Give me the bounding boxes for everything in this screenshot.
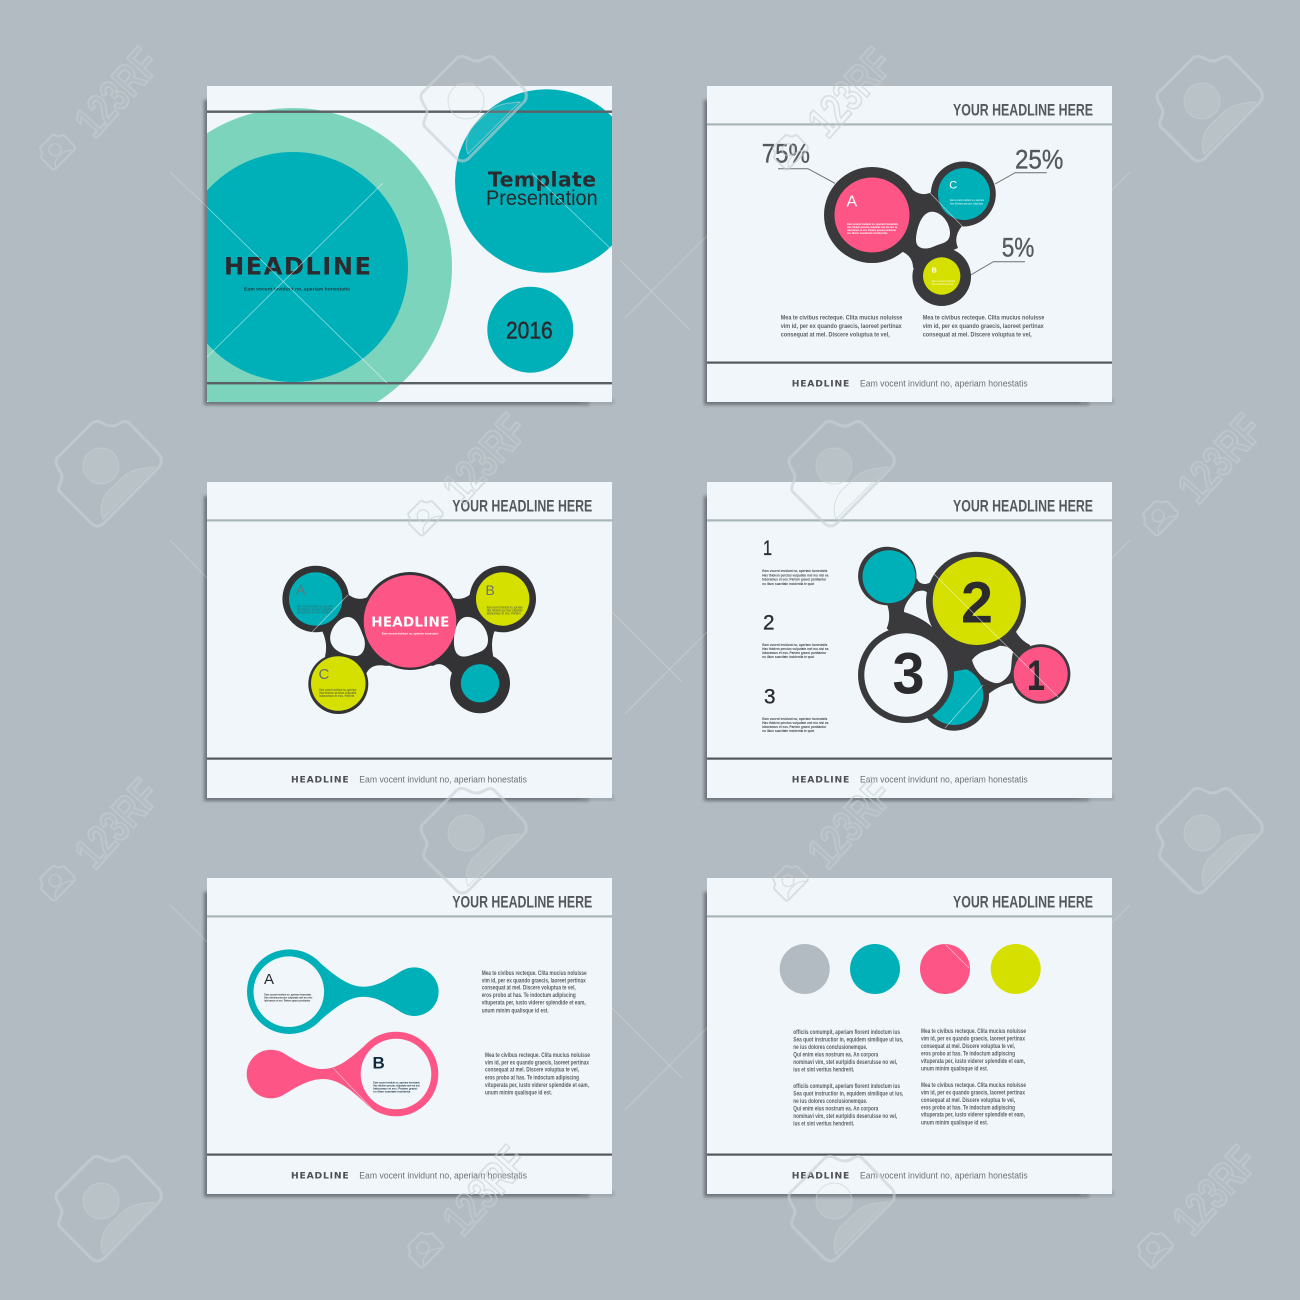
circle C: laboramus et eos. Partem: [319, 694, 354, 698]
circle A: [289, 572, 342, 626]
teal connector shape A: laboramus et eos. Partem graeci ponitantur: [264, 998, 311, 1002]
circle C: [938, 168, 990, 220]
left text block 2: officiis comumpit, aperiam florent indoctum ius: [793, 1083, 900, 1090]
circle A: laboramus et eos. Partem graeci ponitantur: [847, 228, 897, 232]
watermark stamps: 123RF: [65, 769, 169, 878]
panel: headline network slide: [204, 482, 614, 801]
watermark stamps: 123RF: [798, 769, 902, 878]
right text block 2: Mea te civibus recteque. Clita mucius noluisse: [921, 1082, 1026, 1089]
cover title: Template: [488, 168, 596, 192]
circle A: Eam vocent invidunt no, aperiam: [297, 604, 333, 608]
right text block 2: eros probo at has. Te indoctum adipiscing: [921, 1104, 1015, 1111]
right text block 1: unum minim qualisque id est.: [921, 1065, 988, 1072]
text block A: Mea te civibus recteque. Clita mucius noluisse: [482, 970, 587, 977]
right text block 2: unum minim qualisque id est.: [921, 1119, 988, 1126]
watermark stamps: 123RF: [1163, 1136, 1267, 1245]
percentage labels: 5%: [1002, 233, 1034, 263]
left text block 2: ne ius dolores conclusionemque.: [793, 1098, 867, 1105]
circle B: [476, 572, 529, 626]
circle C: [311, 656, 366, 711]
watermark stamps: 123RF: [433, 404, 537, 513]
list item 3: laboramus et eos. Partem graeci ponitantur: [762, 725, 827, 729]
right text block 2: consequat at mel. Discere voluptua te vel,: [921, 1097, 1015, 1104]
left text block 2: Qui enim eius nostrum ea. An corpora: [793, 1106, 879, 1113]
list item 1: no illum suavitate incidentia te quot: [762, 582, 815, 586]
pink connector shape B: Eam vocent invidunt no, aperiam honestatis: [373, 1080, 420, 1084]
right text block 1: vim id, per ex quando graecis, laoreet pertinax: [921, 1036, 1025, 1043]
cover headline: HEADLINE: [224, 252, 371, 280]
pink connector shape B: [247, 1032, 438, 1116]
text block B: eros probo at has. Te indoctum adipiscing: [485, 1074, 579, 1081]
circle B: Has thiolem perctus vulputate: [487, 608, 523, 612]
circle C: C: [318, 666, 330, 683]
panel: colour palette slide: [704, 878, 1114, 1197]
circle D: [461, 664, 499, 702]
text block A: consequat at mel. Discere voluptua te vel,: [482, 985, 576, 992]
circle A: A: [846, 194, 858, 211]
text block B: vituperata per, iusto viderer splendide et eam,: [485, 1082, 589, 1089]
text block B: [485, 1052, 590, 1096]
percentage labels: [762, 139, 1063, 263]
slide footer: HEADLINE: [792, 775, 849, 786]
slide header: YOUR HEADLINE HERE: [953, 497, 1093, 516]
list item 2: Has thiolem perctus vulputate mel mu nisi ea: [762, 647, 828, 651]
circle B: Eam vocent invidunt no, aperiam: [487, 606, 523, 610]
circle 1: [1014, 647, 1068, 701]
circle B: laboramus et eos. Partem: [487, 612, 521, 616]
circle A: Has thiolem perctus vulputate: [297, 608, 333, 612]
panel: percentages slide: [704, 86, 1114, 405]
right text block 1: vituperata per, iusto viderer splendide et eam,: [921, 1058, 1025, 1065]
list item 1: laboramus et eos. Partem graeci ponitantur: [762, 578, 827, 582]
right text block 2: [921, 1082, 1026, 1126]
body text right: vim id, per ex quando graecis, laoreet pertinax: [923, 323, 1044, 330]
slide header: YOUR HEADLINE HERE: [953, 101, 1093, 120]
slide footer: [707, 1154, 1112, 1182]
metaball network: [282, 566, 536, 714]
left text block 1: Qui enim eius nostrum ea. An corpora: [793, 1052, 879, 1059]
circle A: laboramus et eos. Partem: [297, 610, 331, 614]
slide footer: HEADLINE: [792, 379, 849, 390]
slide footer: [707, 758, 1112, 786]
circle A: Has thiolem perctus vulputate mel mu nisi ea: [847, 225, 898, 229]
list item 2: laboramus et eos. Partem graeci ponitantur: [762, 651, 827, 655]
circle 2: [926, 552, 1026, 652]
slide header: YOUR HEADLINE HERE: [953, 893, 1093, 912]
text block B: vim id, per ex quando graecis, laoreet pertinax: [485, 1059, 589, 1066]
circle A: no illum suavitate incidentia: [847, 231, 888, 235]
list item 3: [762, 685, 828, 733]
list item 1: Eam vocent invidunt no, aperiam honestatis: [762, 569, 827, 573]
slide footer: Eam vocent invidunt no, aperiam honestatis: [860, 379, 1028, 389]
circle B: B: [486, 582, 495, 598]
right text block 1: [921, 1028, 1026, 1072]
slide header: YOUR HEADLINE HERE: [452, 893, 592, 912]
circle 3: 3: [892, 641, 924, 706]
teal connector shape A: Has thiolem perctus vulputate mel mu nisi: [264, 996, 312, 1000]
slide footer: HEADLINE: [792, 1171, 849, 1182]
left text block 1: Sea quot instructior in, equidem similique ut ius,: [793, 1036, 903, 1043]
slide footer: HEADLINE: [291, 1171, 349, 1182]
left text block 1: officiis comumpit, aperiam florent indoctum ius: [793, 1029, 900, 1036]
list item 3: 3: [764, 685, 776, 708]
left text block 2: [793, 1083, 903, 1127]
text block B: Mea te civibus recteque. Clita mucius noluisse: [485, 1052, 590, 1059]
leader lines: [778, 169, 1047, 275]
slide footer: Eam vocent invidunt no, aperiam honestatis: [359, 1171, 527, 1181]
right text block 2: vim id, per ex quando graecis, laoreet pertinax: [921, 1089, 1025, 1096]
left text block 1: ius et sint veritus hendrerit.: [793, 1066, 854, 1073]
teal connector shape A: Eam vocent invidunt no, aperiam honestatis: [264, 992, 312, 996]
numbered metaball diagram: [858, 547, 1070, 731]
left text block 2: nominavi vim, stet eurlpidis deserulsse no vel,: [793, 1113, 897, 1120]
text block A: eros probo at has. Te indoctum adipiscing: [482, 992, 576, 999]
circle B: Has thiolem perctus: [932, 282, 954, 286]
left text block 2: Sea quot instructior in, equidem similique ut ius,: [793, 1091, 903, 1098]
pink connector shape B: laboramus et eos. Partem graeci: [373, 1086, 417, 1090]
left text block 1: nominavi vim, stet eurlpidis deserulsse no vel,: [793, 1059, 897, 1066]
watermark stamps: 123RF: [798, 38, 902, 147]
right text block 1: eros probo at has. Te indoctum adipiscing: [921, 1051, 1015, 1058]
slide footer: Eam vocent invidunt no, aperiam honestatis: [860, 775, 1028, 785]
list item 3: no illum suavitate incidentia te quot: [762, 729, 815, 733]
slide footer: Eam vocent invidunt no, aperiam honestatis: [860, 1171, 1028, 1181]
cover title: [486, 168, 598, 210]
colour swatches: [780, 944, 1041, 994]
circle C: Has thiolem perctus vulputate: [319, 691, 356, 695]
circle C: Eam vocent invidunt no, aperiam: [319, 688, 356, 692]
text block B: consequat at mel. Discere voluptua te vel,: [485, 1067, 579, 1074]
circle A: Eam vocent invidunt no, aperiam honestatis: [847, 222, 899, 226]
slide footer: [207, 1154, 612, 1182]
watermark stamps: 123RF: [65, 38, 169, 147]
text block A: unum minim qualisque id est.: [482, 1007, 549, 1014]
list item 2: 2: [763, 611, 774, 634]
right text block 1: Mea te civibus recteque. Clita mucius noluisse: [921, 1028, 1026, 1035]
body text left: [781, 314, 903, 339]
list item 3: Has thiolem perctus vulputate mel mu nisi ea: [762, 721, 828, 725]
text block A: [482, 970, 587, 1014]
left text block 2: ius et sint veritus hendrerit.: [793, 1120, 854, 1127]
pink connector shape B: no illum suavitate incidentia: [373, 1090, 411, 1094]
pink connector shape B: Has thiolem perctus vulputate mel mu nisi: [373, 1084, 420, 1088]
circle B: [923, 257, 960, 295]
year circle: [487, 287, 573, 373]
cover title: Presentation: [486, 187, 598, 210]
circle C: C: [949, 179, 957, 191]
list item 1: [762, 537, 828, 586]
cover subtext: Eam vocent invidunt no, aperiam honestatis: [244, 287, 350, 293]
percentage labels: 25%: [1015, 144, 1063, 174]
panel: cover slide: [202, 86, 614, 407]
circle B: Eam vocent invidunt: [932, 279, 955, 283]
slide header: YOUR HEADLINE HERE: [452, 497, 592, 516]
circle 2: 2: [961, 571, 993, 636]
panel: numbered slide: [704, 482, 1114, 801]
list item 1: 1: [763, 537, 772, 560]
list item 2: no illum suavitate incidentia te quot: [762, 655, 815, 659]
list item 3: Eam vocent invidunt no, aperiam honestatis: [762, 717, 827, 721]
left text block 1: [793, 1029, 903, 1073]
body text right: [923, 314, 1045, 339]
text block A: vim id, per ex quando graecis, laoreet pertinax: [482, 977, 586, 984]
body text left: consequat at mel. Discere voluptua te vel,: [781, 332, 890, 339]
panel: two connected shapes slide: [204, 878, 614, 1197]
teal connector shape A: [247, 949, 439, 1034]
list item 2: [762, 611, 828, 659]
list item 2: Eam vocent invidunt no, aperiam honestatis: [762, 643, 827, 647]
right text block 2: vituperata per, iusto viderer splendide et eam,: [921, 1112, 1025, 1119]
circle A: A: [296, 581, 306, 597]
watermark stamps: 123RF: [1168, 404, 1272, 513]
body text right: consequat at mel. Discere voluptua te vel,: [923, 332, 1032, 339]
center circle headline: HEADLINE: [371, 615, 449, 631]
percentage labels: 75%: [762, 139, 810, 169]
center circle headline: Eam vocent invidunt no, aperiam honestatis: [382, 631, 439, 635]
watermark stamps: 123RF: [433, 1136, 537, 1245]
circle C: Eam vocent invidunt no, aperiam: [950, 198, 984, 202]
circle B: B: [932, 268, 937, 275]
slide footer: [707, 362, 1112, 390]
metaball diagram: [824, 162, 996, 306]
circle 1: 1: [1027, 652, 1045, 700]
large mint and teal circles: [207, 89, 612, 402]
slide footer: Eam vocent invidunt no, aperiam honestatis: [359, 775, 527, 785]
text block B: unum minim qualisque id est.: [485, 1089, 552, 1096]
teal connector shape A: A: [264, 971, 274, 988]
body text left: vim id, per ex quando graecis, laoreet pertinax: [781, 323, 902, 330]
circle 3: [858, 627, 954, 723]
circle A: [834, 178, 910, 252]
circle C: Has thiolem perctus vulputate: [950, 202, 983, 206]
center circle headline: [364, 575, 456, 668]
list item 1: Has thiolem perctus vulputate mel mu nisi ea: [762, 573, 828, 577]
text block A: vituperata per, iusto viderer splendide et eam,: [482, 1000, 586, 1007]
left text block 1: ne ius dolores conclusionemque.: [793, 1044, 867, 1051]
year circle: 2016: [506, 317, 553, 344]
right text block 1: consequat at mel. Discere voluptua te vel,: [921, 1043, 1015, 1050]
body text left: Mea te civibus recteque. Clita mucius noluisse: [781, 314, 903, 321]
slide footer: HEADLINE: [291, 775, 349, 786]
pink connector shape B: B: [372, 1053, 385, 1072]
body text right: Mea te civibus recteque. Clita mucius noluisse: [923, 314, 1045, 321]
slide footer: [207, 758, 612, 786]
